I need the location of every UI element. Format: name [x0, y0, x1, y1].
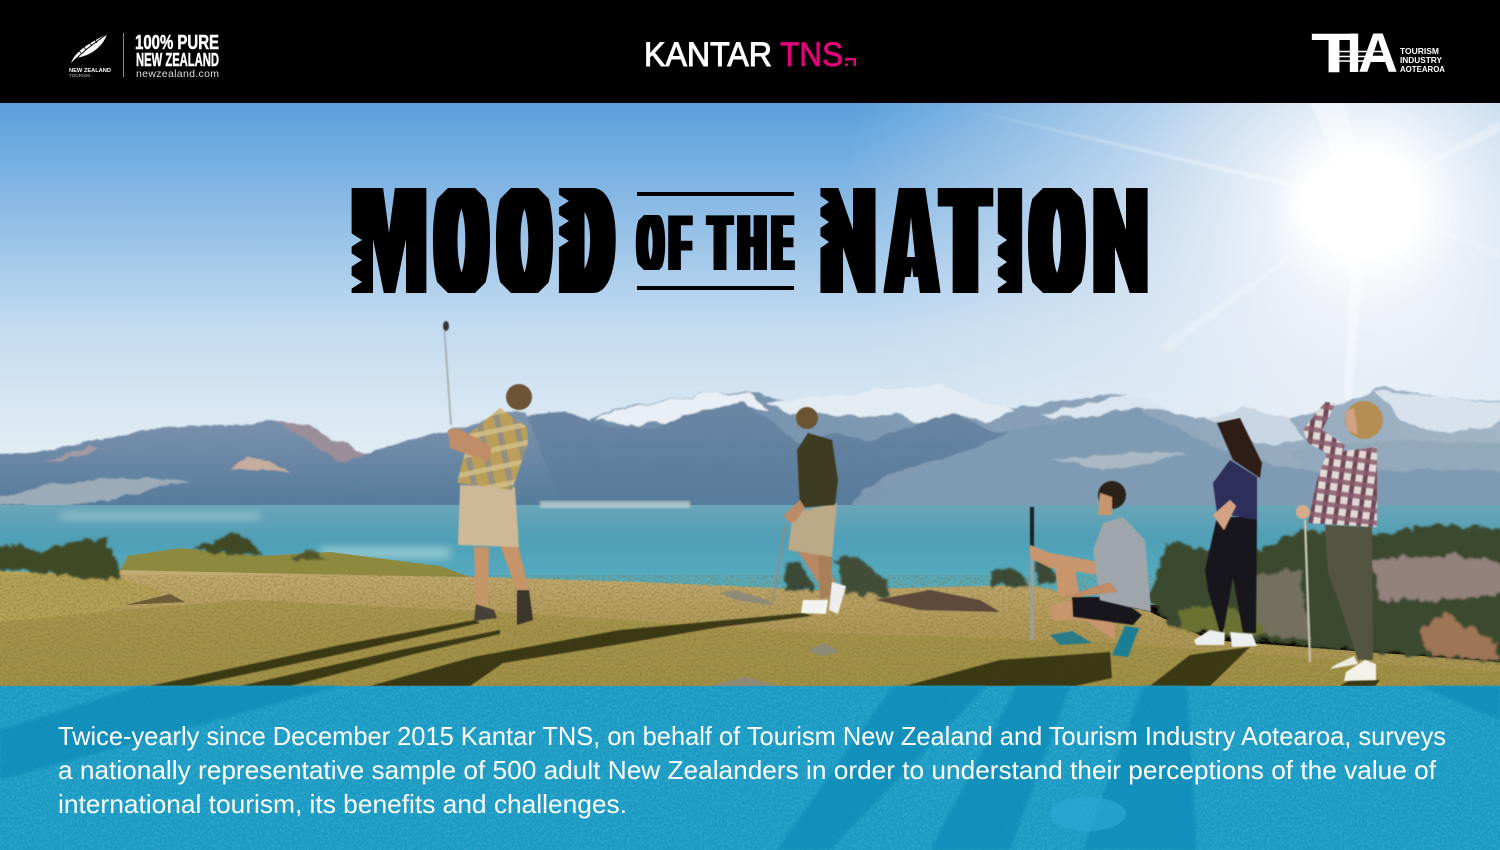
golfer 5: woman in plaid shading her eyes — [1296, 401, 1383, 681]
intro text: international tourism, its benefits and challenges. — [58, 789, 627, 819]
title: Mood of the Nation: O — [1034, 145, 1080, 337]
ground — [0, 548, 1500, 700]
title: Mood of the Nation: D — [562, 156, 610, 324]
intro text: a nationally representative sample of 500 adult New Zealanders in order to understand their perceptions of the value of — [58, 755, 1437, 785]
title: of the: T — [710, 198, 730, 286]
logo: 100% Pure New Zealand: 100% PURE — [135, 32, 219, 54]
logo: Kantar TNS: TNS — [780, 36, 843, 74]
logo: 100% Pure New Zealand — [69, 32, 219, 80]
logo: Tourism Industry Aotearoa: A — [1358, 21, 1398, 84]
title letter cuts: NATION, sky layer — [819, 187, 1130, 294]
title: of the — [635, 192, 794, 292]
logo: Kantar TNS — [644, 36, 856, 74]
title: Mood of the Nation: T — [945, 156, 986, 324]
title: Mood of the Nation: O — [502, 145, 548, 337]
icon: silver fern — [71, 34, 107, 65]
far range — [589, 385, 1500, 505]
title: Mood of the Nation: N — [824, 156, 872, 324]
title: Mood of the Nation: I — [1002, 156, 1018, 324]
left range — [0, 410, 545, 505]
sun flare — [882, 103, 1500, 418]
trees right — [785, 525, 1500, 664]
ground shadows — [150, 613, 1380, 686]
logo: Tourism Industry Aotearoa: TOURISM — [1400, 46, 1439, 56]
logo: 100% Pure New Zealand: NEW ZEALAND — [136, 50, 219, 70]
rocks on the ground — [710, 590, 1000, 686]
trees left — [0, 533, 330, 578]
right massif — [952, 406, 1500, 505]
golfer 4: woman in navy — [1194, 418, 1262, 647]
band shadows — [0, 686, 1500, 850]
title: Mood of the Nation: E — [773, 198, 792, 286]
title: of the: F — [670, 198, 690, 286]
intro text: Twice-yearly since December 2015 Kantar TNS, on behalf of Tourism New Zealand and Tourism Industry Aotearoa, surveys — [58, 721, 1446, 751]
logo: Kantar TNS: KANTAR — [644, 36, 772, 74]
golfer 1: swinging — [443, 321, 533, 625]
title letter cuts: MOOD — [351, 187, 618, 294]
title: Mood of the Nation: O — [438, 145, 484, 337]
logo: 100% Pure New Zealand: TOURISM — [69, 73, 91, 78]
sky — [0, 103, 1500, 456]
snow caps — [595, 393, 770, 425]
mountains — [0, 384, 1500, 505]
logo: Tourism Industry Aotearoa: I — [1346, 21, 1362, 84]
dark central massif — [526, 400, 1008, 505]
header bar — [0, 0, 1500, 103]
logo: 100% Pure New Zealand: newzealand.com — [136, 68, 219, 80]
text: N — [1097, 156, 1144, 324]
intro text — [58, 721, 1446, 819]
title: Mood of the Nation: A — [890, 156, 934, 324]
title letter cuts: NATION, sun glow layer — [819, 187, 1130, 294]
intro band — [0, 686, 1500, 850]
title: Mood of the Nation — [352, 188, 1148, 293]
title: Mood of the Nation: M — [354, 156, 424, 324]
title: of the: O — [638, 194, 662, 292]
hero photo: golfers by an alpine lake — [0, 103, 1500, 700]
logo: Tourism Industry Aotearoa: T — [1311, 21, 1357, 84]
logo: 100% Pure New Zealand: NEW ZEALAND — [69, 68, 111, 74]
lake — [0, 505, 1500, 605]
golfer 3: crouching — [1030, 481, 1151, 657]
golfer 2: standing — [772, 407, 846, 614]
logo: Tourism Industry Aotearoa: INDUSTRY — [1400, 55, 1442, 65]
title: of the: H — [738, 198, 766, 286]
logo: Tourism Industry Aotearoa: AOTEAROA — [1400, 64, 1445, 74]
logo: Tourism Industry Aotearoa — [1311, 21, 1445, 84]
